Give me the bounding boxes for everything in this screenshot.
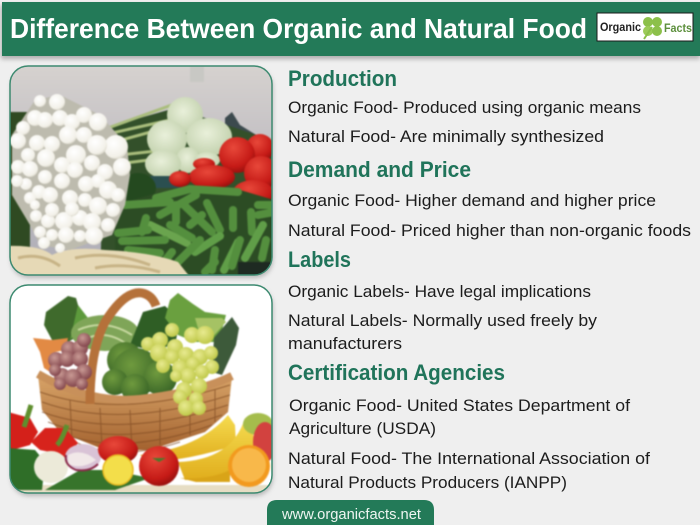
logo: Organic Facts: Facts <box>664 21 692 35</box>
section: production: Production <box>288 66 397 91</box>
broccoli <box>106 341 139 371</box>
herbs <box>8 448 45 490</box>
footer website tab: www.organicfacts.net <box>281 506 422 523</box>
peas <box>231 190 272 260</box>
section: certification agencies <box>288 360 650 492</box>
section: demand and price: Organic Food- Higher demand and higher price <box>288 191 656 210</box>
section: production: Natural Food- Are minimally synthesized <box>288 127 604 146</box>
dark foliage behind the vegetables <box>8 112 30 250</box>
section: certification agencies: Certification Agencies <box>288 360 505 385</box>
section: certification agencies: Organic Food- United States Department of <box>289 396 630 415</box>
section: certification agencies: Natural Products Producers (IANPP) <box>288 473 567 492</box>
footer website tab <box>267 500 434 525</box>
section: labels: Natural Labels- Normally used freely by <box>288 311 598 330</box>
green grapes <box>141 323 219 416</box>
white onions <box>12 95 130 250</box>
section: production <box>288 66 641 146</box>
logo: Organic Facts <box>597 13 693 41</box>
leafy greens <box>43 295 79 342</box>
red peppers <box>8 412 38 450</box>
section: demand and price: Natural Food- Priced higher than non-organic foods <box>288 221 691 240</box>
section: labels <box>288 247 598 353</box>
section: certification agencies: Agriculture (USDA) <box>289 419 436 438</box>
table <box>18 484 268 492</box>
basket handle <box>90 293 156 404</box>
photo: basket of fruit and vegetables <box>8 283 277 496</box>
section: certification agencies: Natural Food- The International Association of <box>288 449 650 468</box>
header banner <box>1 2 700 59</box>
title: Difference Between Organic and Natural Food <box>10 13 587 44</box>
basket <box>38 375 232 450</box>
bananas <box>140 415 236 462</box>
photo: vegetables at market <box>8 64 278 278</box>
cauliflower <box>8 246 190 277</box>
section: demand and price: Demand and Price <box>288 157 471 182</box>
section: labels: manufacturers <box>288 334 402 353</box>
section: demand and price <box>288 157 691 240</box>
carrots <box>33 338 68 372</box>
red grapes <box>48 333 92 390</box>
section: production: Organic Food- Produced using organic means <box>288 98 641 117</box>
section: labels: Organic Labels- Have legal implications <box>288 282 591 301</box>
section: labels: Labels <box>288 247 351 272</box>
logo: Organic Facts: Organic <box>600 20 641 34</box>
